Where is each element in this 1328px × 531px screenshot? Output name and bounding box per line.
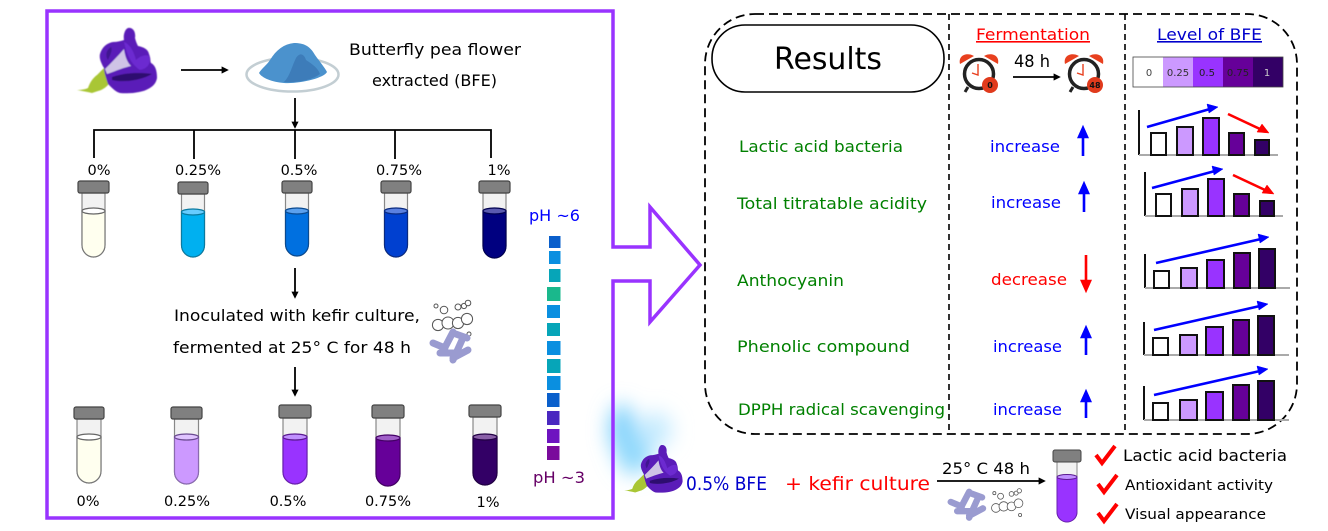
outcome checklist: Lactic acid bacteria	[1123, 446, 1287, 465]
arrow: 0 h to 48 h	[1013, 76, 1059, 78]
label: fermentation conditions: 25° C 48 h	[942, 459, 1030, 478]
bottom row concentration labels: 1%	[476, 495, 500, 511]
icon: blue powder on plate	[246, 43, 338, 92]
outcome checklist: Antioxidant activity	[1125, 478, 1273, 494]
icon: clock at 48 h	[1065, 54, 1103, 93]
results heading pill: Results	[774, 42, 882, 77]
BFE level legend: 0.5	[1199, 68, 1215, 79]
arrow: tubes to inoculation	[294, 268, 296, 297]
icon: kefir culture small	[951, 489, 1023, 518]
text: butterfly pea flower extracted: extracted (BFE)	[372, 71, 497, 90]
bottom row concentration labels: 0%	[76, 494, 100, 510]
label: 48 h: 48 h	[1014, 52, 1050, 72]
result parameter labels: Lactic acid bacteria	[739, 137, 903, 156]
BFE level legend: 1	[1264, 68, 1270, 79]
fermentation effect labels: increase	[993, 337, 1062, 356]
result parameter labels: DPPH radical scavenging	[738, 400, 945, 419]
tube 1%	[479, 181, 510, 258]
result parameter labels	[736, 137, 945, 419]
results column dividers	[949, 14, 1125, 434]
top row concentration labels: 1%	[487, 163, 511, 179]
bottom row concentration labels: 0.25%	[164, 494, 210, 510]
background glow behind small flower	[609, 404, 672, 474]
fermentation effect labels: decrease	[991, 270, 1067, 289]
BFE level legend	[1133, 57, 1283, 87]
bottom row concentration labels: 0.75%	[365, 494, 411, 510]
icon: small butterfly pea flower	[624, 445, 683, 493]
top row concentration labels: 0.5%	[281, 163, 317, 179]
bottom row concentration labels	[76, 494, 500, 511]
arrow: inoculation to fermented tubes	[294, 367, 296, 395]
text: butterfly pea flower extracted	[349, 40, 521, 90]
icon: clock at 0 h	[960, 54, 998, 93]
fermentation effect arrows	[1079, 128, 1090, 418]
dilution tree lines	[94, 130, 491, 159]
level of BFE heading: Level of BFE	[1157, 25, 1262, 44]
pH bottom label: pH ~3	[533, 468, 585, 487]
icon: kefir grains and bubbles	[432, 300, 473, 360]
pH colour strip	[547, 236, 560, 460]
top row concentration labels: 0%	[87, 163, 111, 179]
tube 0%	[78, 181, 109, 257]
text: inoculation step: Inoculated with kefir culture,	[174, 306, 420, 325]
top row concentration labels: 0.25%	[175, 163, 221, 179]
arrow: to final product	[937, 480, 1044, 482]
outcome checklist	[1096, 446, 1287, 523]
fermented tube 1%	[469, 405, 501, 485]
BFE level legend: 0	[1146, 68, 1152, 79]
top row concentration labels: 0.75%	[376, 163, 422, 179]
bar chart: DPPH radical scavenging	[1144, 366, 1289, 420]
tube 0.5%	[282, 181, 312, 256]
tube 0.75%	[381, 181, 411, 257]
fermentation heading: Fermentation	[976, 25, 1090, 44]
fermentation effect labels: increase	[993, 400, 1062, 419]
icon: butterfly pea flower	[77, 28, 157, 93]
icon: clock at 0 h: 0	[987, 81, 993, 90]
icon: final purple tube	[1053, 450, 1081, 522]
arrow: flower to powder	[181, 69, 227, 71]
text: butterfly pea flower extracted: Butterfly pea flower	[349, 40, 521, 59]
result parameter labels: Total titratable acidity	[736, 194, 927, 213]
bar chart: anthocyanin	[1145, 234, 1290, 288]
fermented tube 0%	[74, 407, 104, 483]
arrow: powder to dilution tree	[294, 98, 296, 127]
BFE level legend: 0.75	[1227, 68, 1249, 79]
panel: results dashed frame	[705, 14, 1297, 434]
fermentation effect labels: increase	[990, 137, 1060, 156]
pH top label: pH ~6	[529, 206, 580, 225]
conclusion: 0.5% BFE: 0.5% BFE	[686, 473, 767, 495]
fermented tube 0.25%	[171, 407, 202, 484]
conclusion: kefir culture: + kefir culture	[785, 473, 930, 495]
fermentation effect labels	[990, 137, 1067, 419]
icon: clock at 48 h: 48	[1089, 81, 1101, 90]
bar chart: lactic acid bacteria	[1139, 104, 1278, 155]
BFE level legend: 0.25	[1167, 68, 1189, 79]
panel: experimental workflow frame with arrow	[47, 11, 700, 518]
bottom row concentration labels: 0.5%	[270, 494, 306, 510]
fermented tube 0.5%	[279, 405, 311, 484]
text: inoculation step	[173, 306, 420, 357]
tube 0.25%	[178, 182, 208, 257]
bar chart: total titratable acidity	[1145, 166, 1283, 216]
results heading pill	[712, 25, 944, 92]
outcome checklist: Visual appearance	[1125, 507, 1266, 523]
bar chart: phenolic compound	[1144, 301, 1289, 355]
result parameter labels: Anthocyanin	[737, 271, 844, 290]
fermentation effect labels: increase	[991, 193, 1061, 212]
tubes after fermentation	[74, 405, 501, 486]
text: inoculation step: fermented at 25° C for 48 h	[173, 338, 411, 357]
tubes before fermentation	[78, 181, 510, 258]
result parameter labels: Phenolic compound	[737, 337, 910, 356]
top row concentration labels	[87, 163, 511, 179]
fermented tube 0.75%	[372, 405, 404, 486]
